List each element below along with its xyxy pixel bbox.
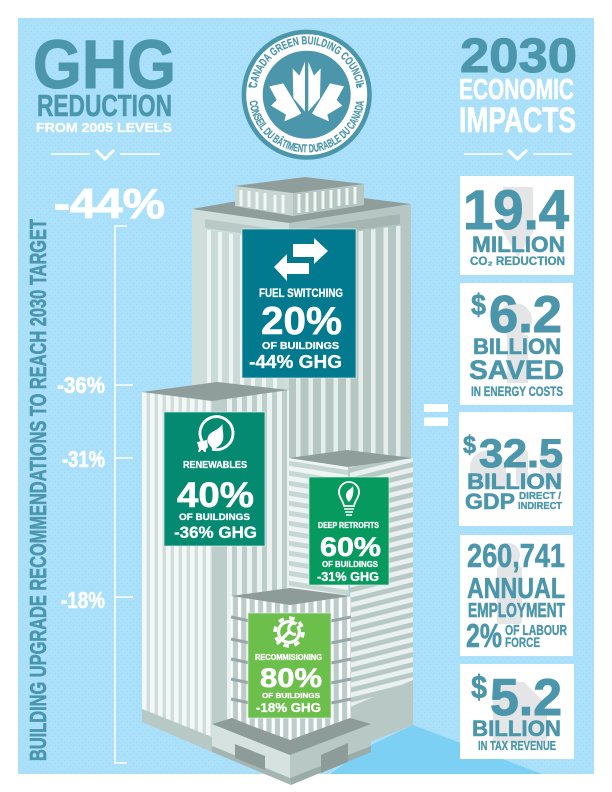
panel: GDP: DIRECT /: [519, 491, 561, 502]
building: podium entrance: [212, 718, 371, 785]
panel: energy savings: BILLION: [473, 334, 561, 359]
panel: recommissioning: -18% GHG: [256, 700, 321, 715]
heading: 2030 economic impacts: 2030: [460, 30, 577, 83]
panel: CO2 reduction: 19.4: [463, 178, 569, 241]
panel: employment: 260,741: [467, 537, 565, 574]
reduction scale bracket: -18%: [61, 587, 105, 613]
panel: renewables: [164, 412, 265, 546]
panel: renewables: RENEWABLES: [183, 460, 247, 471]
panel: fuel switching: OF BUILDINGS: [262, 341, 339, 352]
panel: energy savings: $: [471, 289, 486, 322]
panel: recommissioning: 80%: [260, 663, 322, 693]
panel: GDP: 32.5: [479, 432, 563, 476]
logo: Canada Green Building Council seal: CONSEIL DU BÂTIMENT DURABLE DU CANADA: [250, 100, 364, 152]
panel: GDP: [459, 412, 573, 526]
building: main tower: [192, 177, 411, 480]
icon: person watermark: [496, 543, 522, 624]
panel: employment: 2%: [466, 617, 502, 654]
panel: GDP: BILLION: [467, 469, 562, 494]
vertical axis title: BUILDING UPGRADE RECOMMENDATIONS TO REACH 2030 TARGET: [25, 219, 51, 761]
panel: CO2 reduction: CO₂ REDUCTION: [470, 256, 565, 268]
heading: GHG reduction: [33, 26, 176, 135]
icon: leaf and plug: [197, 417, 233, 452]
building: renewables tower: [142, 382, 289, 752]
heading: GHG reduction: FROM 2005 LEVELS: [36, 121, 172, 135]
panel: renewables: -36% GHG: [174, 523, 257, 542]
arrow: left chevron divider: [51, 150, 160, 159]
panel: energy savings: 6.2: [489, 286, 562, 344]
panel: deep retrofits: 60%: [320, 532, 381, 562]
building: recommissioning tower: [231, 588, 351, 745]
total reduction figure: -44%: [54, 180, 165, 227]
reduction scale bracket: -36%: [57, 372, 105, 398]
panel: deep retrofits: OF BUILDINGS: [322, 560, 379, 569]
panel: GDP: $: [463, 431, 476, 459]
icon: gear and wrench: [275, 618, 303, 646]
panel: recommissioning: RECOMMISIONING: [255, 653, 322, 662]
panel: employment: EMPLOYMENT: [468, 600, 565, 622]
panel: employment: ANNUAL: [467, 573, 565, 605]
logo: Canada Green Building Council seal: CANADA GREEN BUILDING COUNCIL: [249, 36, 364, 88]
panel: fuel switching: FUEL SWITCHING: [259, 286, 343, 300]
icon: swap arrows: [274, 238, 328, 281]
icon: light bulb: [339, 482, 359, 515]
panel: tax revenue: [460, 664, 574, 759]
building: deep retrofit tower: [289, 450, 413, 750]
heading: GHG reduction: REDUCTION: [37, 88, 172, 123]
panel: deep retrofits: [309, 477, 389, 585]
logo: Canada Green Building Council seal: [242, 30, 372, 160]
panel: tax revenue: 5.2: [490, 669, 562, 727]
icon: document watermark: [493, 682, 547, 743]
panel: CO2 reduction: [460, 176, 574, 275]
icon: gauge watermark: [470, 449, 562, 487]
heading: GHG reduction: GHG: [33, 26, 176, 103]
panel: employment: FORCE: [505, 634, 540, 650]
icon: plug watermark: [498, 303, 532, 383]
panel: fuel switching: 20%: [261, 300, 342, 343]
panel: deep retrofits: -31% GHG: [317, 569, 379, 584]
equals sign: [424, 404, 448, 426]
panel: energy savings: IN ENERGY COSTS: [471, 383, 563, 399]
panel: energy savings: SAVED: [469, 355, 564, 385]
heading: 2030 economic impacts: IMPACTS: [459, 101, 576, 140]
panel: employment: OF LABOUR: [505, 622, 567, 639]
panel: renewables: 40%: [177, 476, 254, 515]
reduction scale bracket: [57, 226, 133, 763]
panel: recommissioning: [248, 613, 331, 718]
heading: 2030 economic impacts: [459, 30, 577, 140]
panel: GDP: GDP: [465, 489, 515, 514]
panel: fuel switching: -44% GHG: [249, 352, 342, 372]
panel: renewables: OF BUILDINGS: [179, 512, 250, 523]
panel: GDP: INDIRECT: [518, 501, 562, 512]
panel: deep retrofits: DEEP RETROFITS: [318, 520, 379, 530]
reduction scale bracket: -31%: [62, 446, 105, 472]
panel: energy savings: [460, 283, 573, 405]
panel: tax revenue: IN TAX REVENUE: [478, 738, 556, 753]
ground shadow: [330, 725, 542, 774]
arrow: right chevron divider: [464, 150, 572, 159]
panel: tax revenue: BILLION: [472, 716, 561, 741]
icon: down arrow watermark: [503, 187, 533, 257]
panel: fuel switching: [242, 229, 356, 378]
panel: tax revenue: $: [471, 669, 487, 705]
panel: employment: [460, 535, 573, 656]
panel: CO2 reduction: MILLION: [472, 232, 565, 257]
panel: recommissioning: OF BUILDINGS: [262, 691, 320, 700]
